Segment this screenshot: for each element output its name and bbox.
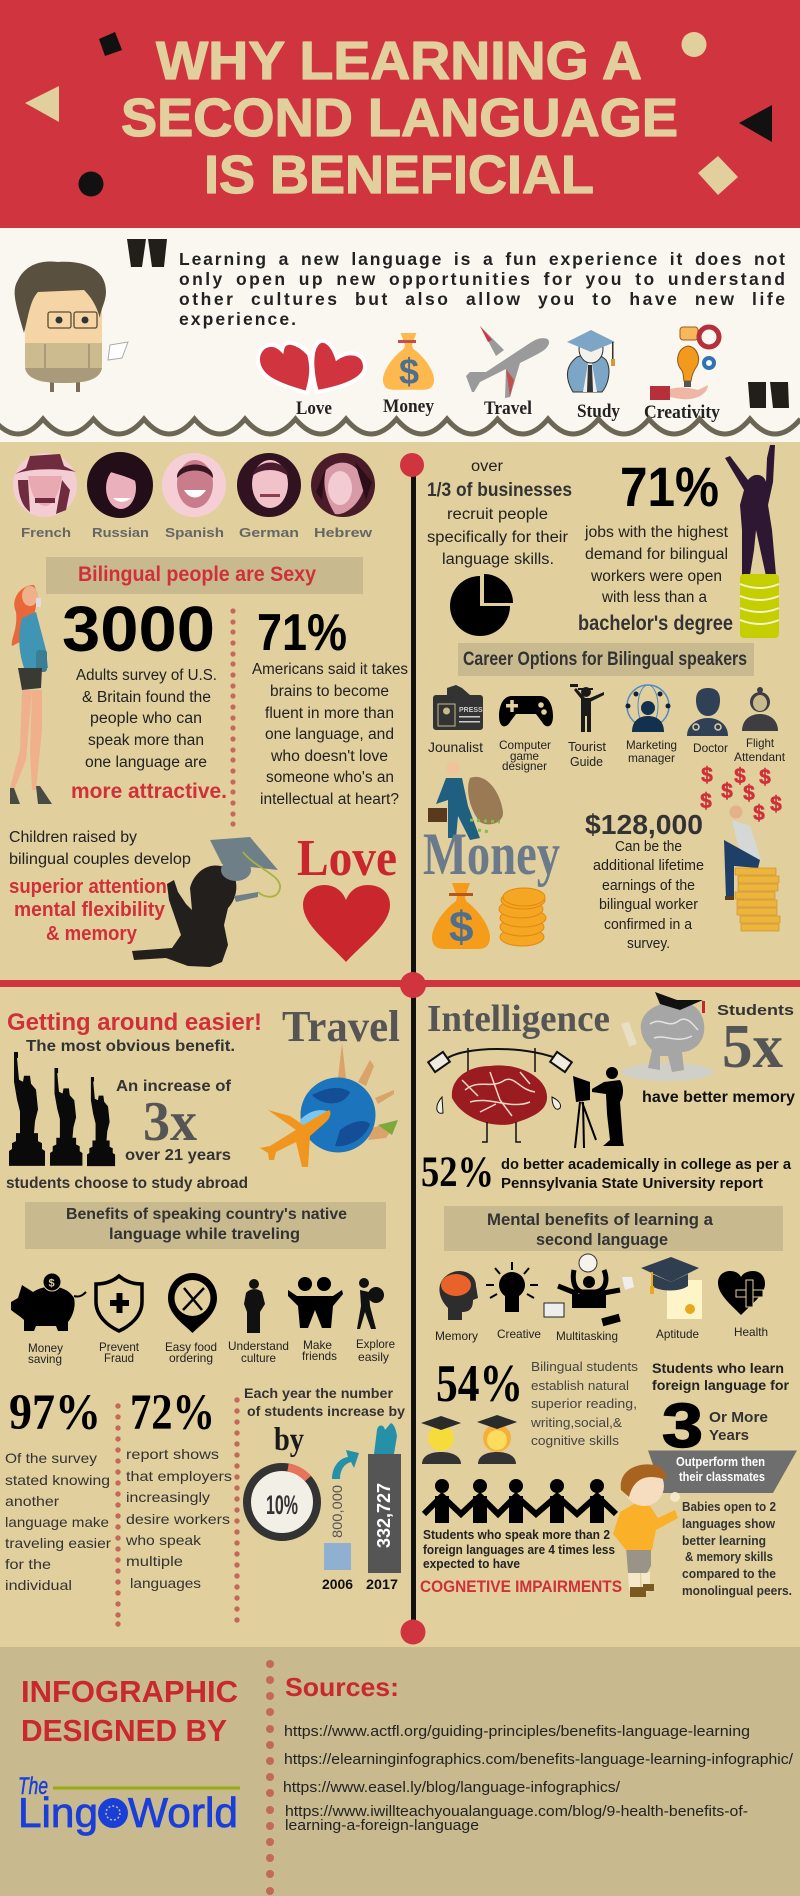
opening quote mark — [127, 239, 167, 267]
career labels: Jounalist — [428, 739, 483, 755]
icon: globe with plane — [260, 1043, 398, 1167]
stat: 71% jobs: jobs with the highest — [584, 524, 729, 541]
travel benefit labels: saving — [28, 1352, 62, 1366]
footer panel — [0, 1647, 800, 1896]
panel: money — [423, 445, 786, 952]
stat: 71% americans — [252, 604, 408, 808]
heading: getting around easier — [7, 1009, 262, 1055]
stat: 3x increase: students choose to study abroad — [6, 1175, 248, 1192]
stat: $128,000: survey. — [627, 936, 670, 952]
stat: 54%: establish natural — [531, 1378, 629, 1393]
travel benefit labels: Understand — [228, 1339, 289, 1353]
icon: head with brain — [439, 1271, 478, 1320]
banner: benefits of native language — [25, 1202, 386, 1249]
stat: 71% jobs: bachelor's degree — [578, 612, 733, 635]
icon: location pin with cutlery — [168, 1273, 217, 1333]
text: babies: & memory skills — [685, 1549, 773, 1564]
icon: shield with plus — [96, 1276, 142, 1331]
icon labels: Money — [383, 396, 434, 417]
heading: getting around easier: Getting around easier! — [7, 1009, 262, 1036]
icon: doctor — [687, 688, 728, 736]
bar: 2017: 2017 — [366, 1576, 398, 1592]
stat: 54%: 54% — [436, 1355, 523, 1413]
career labels: Doctor — [693, 741, 728, 755]
icon labels: Love — [296, 398, 332, 419]
icon: painter silhouette — [573, 1067, 624, 1148]
icon: two friends — [288, 1277, 343, 1328]
stat: 72% — [125, 1385, 232, 1591]
falling dollar signs: $ — [721, 780, 733, 803]
heading: getting around easier: The most obvious benefit. — [26, 1038, 235, 1055]
icon labels: Travel — [484, 398, 532, 419]
stat: 71% jobs — [578, 455, 733, 635]
banner: career options — [458, 643, 754, 676]
portrait labels: Hebrew — [314, 525, 373, 540]
text: one third of businesses — [427, 458, 572, 568]
stat: 54% — [436, 1355, 639, 1448]
text: one third of businesses: 1/3 of businesses — [427, 480, 572, 501]
mental benefit labels: Health — [734, 1325, 768, 1339]
portrait: Russian — [87, 452, 153, 518]
mental benefit labels: Creative — [497, 1327, 541, 1341]
text: one third of businesses: recruit people — [447, 506, 548, 523]
stat: $128,000: Can be the — [615, 839, 682, 855]
banner: mental benefits — [444, 1206, 783, 1251]
stat: 97%: individual — [5, 1577, 72, 1593]
stat: three or more years: Outperform then — [676, 1455, 765, 1469]
banner: career options: Career Options for Bilingual speakers — [463, 649, 747, 670]
stat: 72%: who speak — [125, 1532, 202, 1548]
stat: 72%: desire workers — [126, 1511, 230, 1527]
header band — [0, 0, 800, 228]
panel: travel — [5, 1002, 405, 1627]
falling dollar signs: $ — [700, 790, 712, 813]
stat: 3x increase: An increase of — [116, 1078, 232, 1095]
stat: 3000 adults: one language are — [85, 754, 207, 771]
donut: 10% — [247, 1467, 317, 1537]
logo: the lingo world — [18, 1773, 240, 1836]
central timeline — [400, 453, 426, 1644]
stat: 72%: that employers — [126, 1468, 232, 1484]
travel benefit labels: Explore — [356, 1337, 395, 1351]
career labels: Marketing — [626, 738, 677, 752]
stat: 71% jobs: 71% — [620, 455, 719, 518]
stat: $128,000: confirmed in a — [604, 917, 693, 933]
icon: piggy bank — [11, 1273, 86, 1331]
stat: 71% americans: someone who's an — [266, 769, 394, 786]
stat: three or more years: Or More — [709, 1409, 768, 1426]
stat: students 5x: have better memory — [642, 1089, 795, 1106]
stat: 71% americans: 71% — [257, 604, 347, 662]
stat: 3000 adults: people who can — [90, 710, 202, 727]
stat: 71% americans: Americans said it takes — [252, 661, 408, 678]
travel benefit labels: Easy food — [165, 1340, 217, 1354]
icon: journalist badge: PRESS — [459, 707, 483, 714]
stat: 52%: Pennsylvania State University report — [501, 1176, 763, 1192]
falling dollar signs: $ — [701, 764, 713, 787]
sources heading: Sources: — [285, 1672, 399, 1702]
career labels — [428, 736, 786, 773]
travel benefit labels: Make — [303, 1338, 332, 1352]
sources list: https://www.easel.ly/blog/language-infographics/ — [283, 1780, 621, 1796]
text: babies: monolingual peers. — [682, 1583, 792, 1598]
sources list: https://www.actfl.org/guiding-principles/benefits-language-learning — [284, 1724, 750, 1740]
stat: students 5x: Students — [717, 1002, 794, 1019]
language portraits — [13, 452, 375, 518]
logo: the lingo world: The — [18, 1773, 48, 1800]
icon: multitasking figure — [544, 1254, 634, 1326]
mental benefit labels — [435, 1325, 768, 1343]
icon: pie chart — [450, 574, 513, 636]
decorative shapes — [25, 32, 772, 196]
text: children raised by bilingual couples: Children raised by — [9, 829, 137, 846]
icon: woman on phone — [10, 585, 52, 804]
portrait: Spanish — [162, 453, 226, 517]
title: WHY LEARNING A — [156, 31, 642, 91]
travel benefit labels: culture — [241, 1351, 276, 1365]
stat: 97%: for the — [5, 1556, 51, 1572]
intro text: experience. — [179, 309, 296, 329]
text: cognitive impairments: Students who speak more than 2 — [423, 1527, 610, 1542]
designed by text — [21, 1674, 238, 1748]
stat: 97%: stated knowing — [5, 1472, 110, 1488]
donut: 10%: 10% — [266, 1490, 298, 1520]
text: children raised by bilingual couples — [9, 829, 191, 945]
stat: 54%: Bilingual students — [531, 1359, 639, 1374]
stat: 52% — [421, 1149, 792, 1196]
banner: mental benefits: Mental benefits of learning a — [487, 1210, 714, 1229]
text: cognitive impairments: expected to have — [423, 1556, 520, 1571]
designed by text: DESIGNED BY — [21, 1713, 227, 1748]
stat: 72%: languages — [130, 1575, 201, 1591]
intro text: other cultures but also allow you to have new life — [179, 289, 785, 309]
career labels: Guide — [570, 754, 603, 769]
career labels: Attendant — [734, 750, 786, 764]
text: cognitive impairments: COGNETIVE IMPAIRMENTS — [420, 1578, 622, 1596]
icon: heart — [303, 885, 390, 962]
icon: creativity bulb and gears — [650, 327, 719, 400]
travel benefit labels: Money — [28, 1341, 63, 1355]
stat: 52%: 52% — [421, 1149, 494, 1196]
career labels: game — [510, 749, 539, 763]
sources list: https://elearninginfographics.com/benefits-language-learning-infographic/ — [284, 1752, 794, 1768]
icon: coin stack — [499, 888, 546, 946]
icon: chain of people — [424, 1479, 616, 1523]
logo: the lingo world: Ling — [18, 1789, 98, 1836]
icon: game controller — [499, 696, 553, 726]
text: children raised by bilingual couples: mental flexibility — [14, 899, 166, 921]
chart: student growth: Each year the number — [244, 1385, 394, 1401]
text: cognitive impairments — [420, 1527, 622, 1596]
icon: tourist guide — [570, 684, 604, 732]
falling dollar signs — [700, 764, 782, 825]
stat: 71% americans: fluent in more than — [265, 705, 394, 722]
career labels: Flight — [746, 736, 775, 750]
icon: thinking boy — [613, 1464, 680, 1597]
career labels: Tourist — [568, 739, 606, 754]
title: SECOND LANGUAGE — [121, 88, 678, 148]
career labels: manager — [628, 751, 675, 765]
stat: 71% jobs: with less than a — [601, 589, 707, 606]
falling dollar signs: $ — [770, 793, 782, 816]
icon: baby with graduation cap — [132, 837, 280, 967]
bar: 2006: 2006 — [322, 1576, 353, 1592]
stat: 71% americans: brains to become — [270, 683, 389, 700]
banner: mental benefits: second language — [536, 1230, 668, 1249]
falling dollar signs: $ — [734, 765, 746, 788]
banner: benefits of native language: Benefits of speaking country's native — [66, 1206, 347, 1223]
text: one third of businesses: over — [471, 458, 503, 475]
stat: 3000 adults: & Britain found the — [82, 689, 211, 706]
banner: benefits of native language: language while traveling — [109, 1226, 300, 1243]
icon: woman figure — [244, 1279, 265, 1333]
falling dollar signs: $ — [753, 802, 765, 825]
stat: 3000 adults — [62, 593, 227, 803]
icon: woman on coins — [725, 445, 779, 638]
stat: 97%: 97% — [9, 1385, 101, 1441]
dotted separator — [234, 1397, 240, 1623]
icon: cartoon man — [15, 262, 128, 392]
icon: money bag — [383, 333, 434, 392]
icon labels: Creativity — [644, 402, 720, 423]
stat: 72%: increasingly — [126, 1489, 210, 1505]
falling dollar signs: $ — [743, 782, 755, 805]
portrait labels: Russian — [92, 525, 149, 540]
icon: hiker — [357, 1278, 384, 1329]
bar: 2017: 332,727 — [374, 1483, 394, 1548]
icon: orange money bag — [432, 883, 490, 952]
title: IS BENEFICIAL — [204, 145, 594, 205]
portrait: Hebrew — [311, 453, 375, 517]
sources list: https://www.iwillteachyoualanguage.com/blog/9-health-benefits-of- — [285, 1804, 748, 1820]
icon: businessman with money sack — [428, 762, 503, 840]
career icons — [433, 684, 778, 736]
dotted separator — [230, 608, 236, 827]
sources list — [283, 1724, 794, 1834]
stat: 54%: superior reading, — [531, 1396, 637, 1411]
icon: orange money bag: $ — [449, 903, 473, 952]
stat: three or more years: foreign language for — [652, 1377, 790, 1393]
icon: money bag: $ — [399, 351, 419, 392]
stat: 97%: Of the survey — [5, 1450, 97, 1466]
sources list: learning-a-foreign-language — [285, 1818, 479, 1834]
stat: three or more years — [648, 1360, 797, 1493]
designed by text: INFOGRAPHIC — [21, 1674, 238, 1709]
icon: flight attendant — [742, 687, 778, 731]
icon: light bulb — [486, 1262, 538, 1312]
text: babies: compared to the — [682, 1566, 776, 1581]
stat: 72%: report shows — [126, 1446, 219, 1462]
portrait: French — [13, 453, 77, 517]
text: cognitive impairments: foreign languages are 4 times less — [423, 1542, 615, 1557]
mental benefit labels: Aptitude — [656, 1327, 699, 1341]
stat: 97%: another — [5, 1493, 59, 1509]
icon labels — [296, 396, 720, 423]
stat: $128,000: bilingual worker — [599, 897, 698, 913]
stat: 71% jobs: demand for bilingual — [585, 546, 728, 563]
text: babies: better learning — [682, 1533, 766, 1548]
heading: love: Love — [297, 830, 397, 887]
heading: intelligence: Intelligence — [427, 998, 610, 1040]
intro text — [179, 249, 785, 329]
chart: student growth: by — [274, 1422, 304, 1458]
stat: 54%: cognitive skills — [531, 1433, 620, 1448]
bar: 2006: 800,000 — [329, 1485, 345, 1538]
stat: 71% americans: intellectual at heart? — [260, 791, 399, 808]
banner: bilingual people are sexy — [46, 557, 363, 594]
stat: $128,000 — [585, 809, 704, 952]
wave divider — [0, 419, 800, 434]
falling dollar signs: $ — [759, 766, 771, 789]
red horizontal divider — [0, 980, 800, 987]
travel benefit labels — [28, 1337, 395, 1366]
icon: graduate brain — [621, 992, 714, 1081]
travel benefit labels: easily — [358, 1350, 389, 1364]
icon: graduate students — [421, 1415, 517, 1464]
intro band — [0, 228, 800, 442]
travel benefit icons — [11, 1273, 384, 1333]
panel: intelligence — [420, 992, 797, 1598]
icon: arrow up — [332, 1450, 359, 1479]
dotted separator — [115, 1403, 121, 1627]
icon: journalist badge — [433, 685, 483, 730]
dotted separator — [266, 1660, 274, 1895]
bar: 2017 — [366, 1423, 401, 1592]
chart: student growth — [244, 1385, 405, 1592]
stat: 3000 adults: more attractive. — [71, 780, 227, 803]
panel: love — [9, 452, 408, 967]
icon labels: Study — [577, 401, 620, 422]
heading: money: Money — [423, 821, 560, 887]
career labels: designer — [502, 759, 547, 773]
stat: 71% americans: who doesn't love — [270, 748, 388, 765]
stat: 71% americans: one language, and — [265, 726, 394, 743]
text: one third of businesses: specifically for their — [427, 529, 568, 546]
stat: $128,000: earnings of the — [602, 878, 695, 894]
icon: three statues of liberty — [9, 1052, 115, 1166]
mental benefit labels: Memory — [435, 1329, 478, 1343]
stat: students 5x — [642, 1002, 795, 1106]
stat: three or more years: Years — [709, 1427, 749, 1444]
portrait labels: German — [239, 525, 299, 540]
portrait: German — [237, 453, 301, 517]
banner: bilingual people are sexy: Bilingual people are Sexy — [78, 563, 316, 586]
stat: 3x increase: over 21 years — [125, 1147, 231, 1164]
stat: $128,000: $128,000 — [585, 809, 703, 840]
logo: the lingo world: World — [128, 1789, 238, 1836]
stat: three or more years: 3 — [662, 1392, 703, 1461]
heading: travel: Travel — [282, 1002, 400, 1051]
icon: man sitting on gold coins — [724, 806, 780, 931]
stat: students 5x: 5x — [722, 1013, 783, 1081]
icon: heart with plus — [718, 1271, 765, 1315]
stat: 3x increase — [6, 1078, 248, 1192]
portrait labels — [21, 525, 373, 540]
stat: three or more years: Students who learn — [652, 1360, 784, 1376]
icon: marketing manager — [626, 685, 670, 732]
closing quote mark — [748, 382, 789, 408]
text: children raised by bilingual couples: superior attention, — [9, 876, 172, 898]
icon: airplane — [466, 326, 549, 398]
stat: 97% — [5, 1385, 111, 1593]
icon: graduation cap with diploma — [641, 1257, 702, 1319]
stat: 3000 adults: Adults survey of U.S. — [76, 667, 217, 684]
stat: 54%: writing,social,& — [530, 1415, 622, 1430]
travel benefit labels: friends — [302, 1349, 337, 1363]
chart: student growth: of students increase by — [247, 1403, 405, 1419]
text: children raised by bilingual couples: & memory — [46, 923, 138, 945]
intro text: Learning a new language is a fun experience it does not — [179, 249, 785, 269]
text: children raised by bilingual couples: bilingual couples develop — [9, 851, 191, 868]
intro text: only open up new opportunities for you to understand — [179, 269, 785, 289]
stat: 97%: language make — [5, 1514, 109, 1530]
bar: 2006 — [322, 1485, 353, 1592]
mental benefit labels: Multitasking — [556, 1329, 618, 1343]
stat: 3000 adults: speak more than — [88, 732, 204, 749]
stat: 72%: multiple — [126, 1553, 183, 1569]
stat: 72%: 72% — [130, 1385, 215, 1441]
portrait labels: French — [21, 525, 71, 540]
stat: 71% jobs: workers were open — [590, 568, 722, 585]
text: one third of businesses: language skills. — [442, 551, 554, 568]
icon: student — [567, 330, 615, 392]
travel benefit labels: Fraud — [104, 1351, 134, 1365]
stat: 52%: do better academically in college as per a — [501, 1157, 792, 1173]
stat: 3000 adults: 3000 — [62, 593, 215, 665]
travel benefit labels: Prevent — [99, 1340, 140, 1354]
icon: hearts — [258, 341, 365, 393]
portrait labels: Spanish — [165, 525, 224, 540]
icon: piggy bank: $ — [48, 1278, 55, 1290]
text: babies: Babies open to 2 — [682, 1499, 776, 1514]
travel benefit labels: ordering — [169, 1351, 213, 1365]
text: babies: languages show — [682, 1516, 776, 1531]
mental benefit icons — [439, 1254, 765, 1326]
stat: 3x increase: 3x — [143, 1091, 197, 1153]
stat: 97%: traveling easier — [5, 1535, 111, 1551]
stat: three or more years: their classmates — [679, 1470, 765, 1484]
icon: red brain with spotlights — [428, 1048, 572, 1142]
stat: $128,000: additional lifetime — [593, 858, 704, 874]
career labels: Computer — [499, 738, 551, 752]
title — [121, 31, 678, 205]
text: babies — [682, 1499, 792, 1598]
